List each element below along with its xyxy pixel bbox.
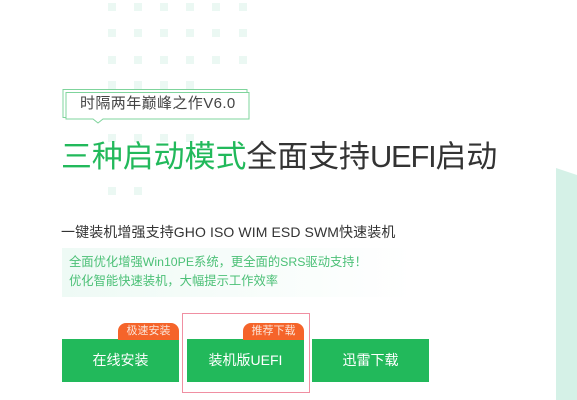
version tag: 时隔两年巅峰之作V6.0 xyxy=(80,95,236,112)
decorative right green shape xyxy=(556,168,577,400)
highlight frame around recommended button xyxy=(182,313,310,393)
badge: fast install: 极速安装 xyxy=(126,325,170,337)
button: UEFI install: 装机版UEFI xyxy=(209,352,282,368)
subtitle: 一键装机增强支持GHO ISO WIM ESD SWM快速装机 xyxy=(61,224,395,240)
badge: recommended xyxy=(243,323,304,340)
main title: 三种启动模式全面支持UEFI启动 xyxy=(61,139,497,174)
button: online install: 在线安装 xyxy=(92,352,148,368)
description line 1: 全面优化增强Win10PE系统，更全面的SRS驱动支持！ xyxy=(69,255,367,269)
button: Thunder download xyxy=(312,339,429,382)
version tag xyxy=(62,89,250,124)
feature description panel xyxy=(62,248,412,297)
description line 2: 优化智能快速装机，大幅提示工作效率 xyxy=(69,274,278,288)
badge: fast install xyxy=(118,323,179,340)
button: online install xyxy=(62,339,179,382)
button: UEFI install xyxy=(187,339,304,382)
badge: recommended: 推荐下载 xyxy=(252,325,296,337)
button: Thunder download: 迅雷下载 xyxy=(342,352,398,368)
